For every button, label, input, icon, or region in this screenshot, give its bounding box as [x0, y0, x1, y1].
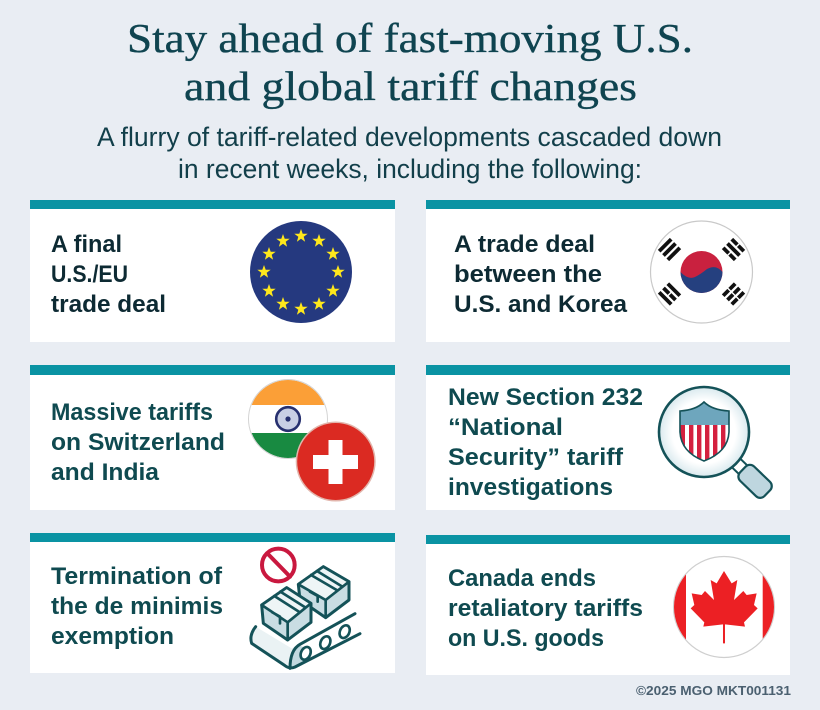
- text: Section 232 investigations: Security” tariff: [448, 444, 624, 471]
- text: Switzerland and India tariffs: Massive tariffs: [51, 399, 213, 426]
- text: U.S./EU trade deal: [51, 231, 166, 318]
- text: U.S. and Korea trade deal: [454, 231, 627, 318]
- conveyor belt: [251, 614, 360, 668]
- text: U.S./EU trade deal: U.S./EU: [51, 261, 128, 288]
- title: and global tariff changes: [184, 63, 637, 109]
- box front: [262, 588, 311, 640]
- title: [127, 15, 693, 109]
- text: Canada ends retaliatory tariffs: [448, 565, 643, 652]
- text: Switzerland and India tariffs: [51, 399, 225, 486]
- icon: prohibition sign: [262, 549, 295, 581]
- text: Canada ends retaliatory tariffs: Canada ends: [448, 565, 596, 592]
- text: de minimis exemption: exemption: [51, 623, 174, 650]
- icon: conveyor belt with boxes: [251, 549, 360, 668]
- text: U.S./EU trade deal: trade deal: [51, 291, 166, 318]
- text: Section 232 investigations: New Section 232: [448, 384, 643, 411]
- text: Switzerland and India tariffs: and India: [51, 459, 159, 486]
- text: U.S./EU trade deal: A final: [51, 231, 122, 258]
- icon: Indian flag: [248, 380, 328, 460]
- subtitle: in recent weeks, including the following:: [178, 154, 642, 184]
- title: Stay ahead of fast-moving U.S.: [127, 15, 693, 61]
- text: de minimis exemption: Termination of: [51, 563, 223, 590]
- text: Section 232 investigations: “National: [448, 414, 563, 441]
- text: U.S. and Korea trade deal: U.S. and Korea: [454, 291, 627, 318]
- panel: de minimis exemption: [30, 533, 395, 673]
- text: Canada ends retaliatory tariffs: retaliatory tariffs: [448, 595, 643, 622]
- text: de minimis exemption: [51, 563, 223, 650]
- box back: [298, 567, 349, 618]
- subtitle: [97, 122, 722, 184]
- text: Section 232 investigations: [448, 384, 643, 501]
- footer credit: ©2025 MGO MKT001131: [636, 684, 791, 698]
- panel: U.S./EU trade deal: [30, 200, 395, 342]
- panel: U.S. and Korea trade deal: [426, 200, 790, 342]
- icon: EU flag: [250, 221, 352, 323]
- text: U.S. and Korea trade deal: between the: [454, 261, 602, 288]
- icon: magnifying glass with shield: [659, 387, 774, 500]
- text: Switzerland and India tariffs: on Switzerland: [51, 429, 225, 456]
- text: de minimis exemption: the de minimis: [51, 593, 223, 620]
- panel: Section 232 investigations: [426, 365, 790, 510]
- subtitle: A flurry of tariff-related developments cascaded down: [97, 122, 722, 152]
- icon: Korean flag: [650, 221, 752, 323]
- text: Section 232 investigations: investigations: [448, 474, 613, 501]
- panel: Switzerland and India tariffs: [30, 365, 395, 510]
- panel: Canada ends retaliatory tariffs: [426, 535, 790, 675]
- icon: Canadian flag: [672, 555, 777, 659]
- icon: Swiss flag: [296, 422, 376, 502]
- text: U.S. and Korea trade deal: A trade deal: [454, 231, 595, 258]
- text: Canada ends retaliatory tariffs: on U.S. goods: [448, 625, 604, 652]
